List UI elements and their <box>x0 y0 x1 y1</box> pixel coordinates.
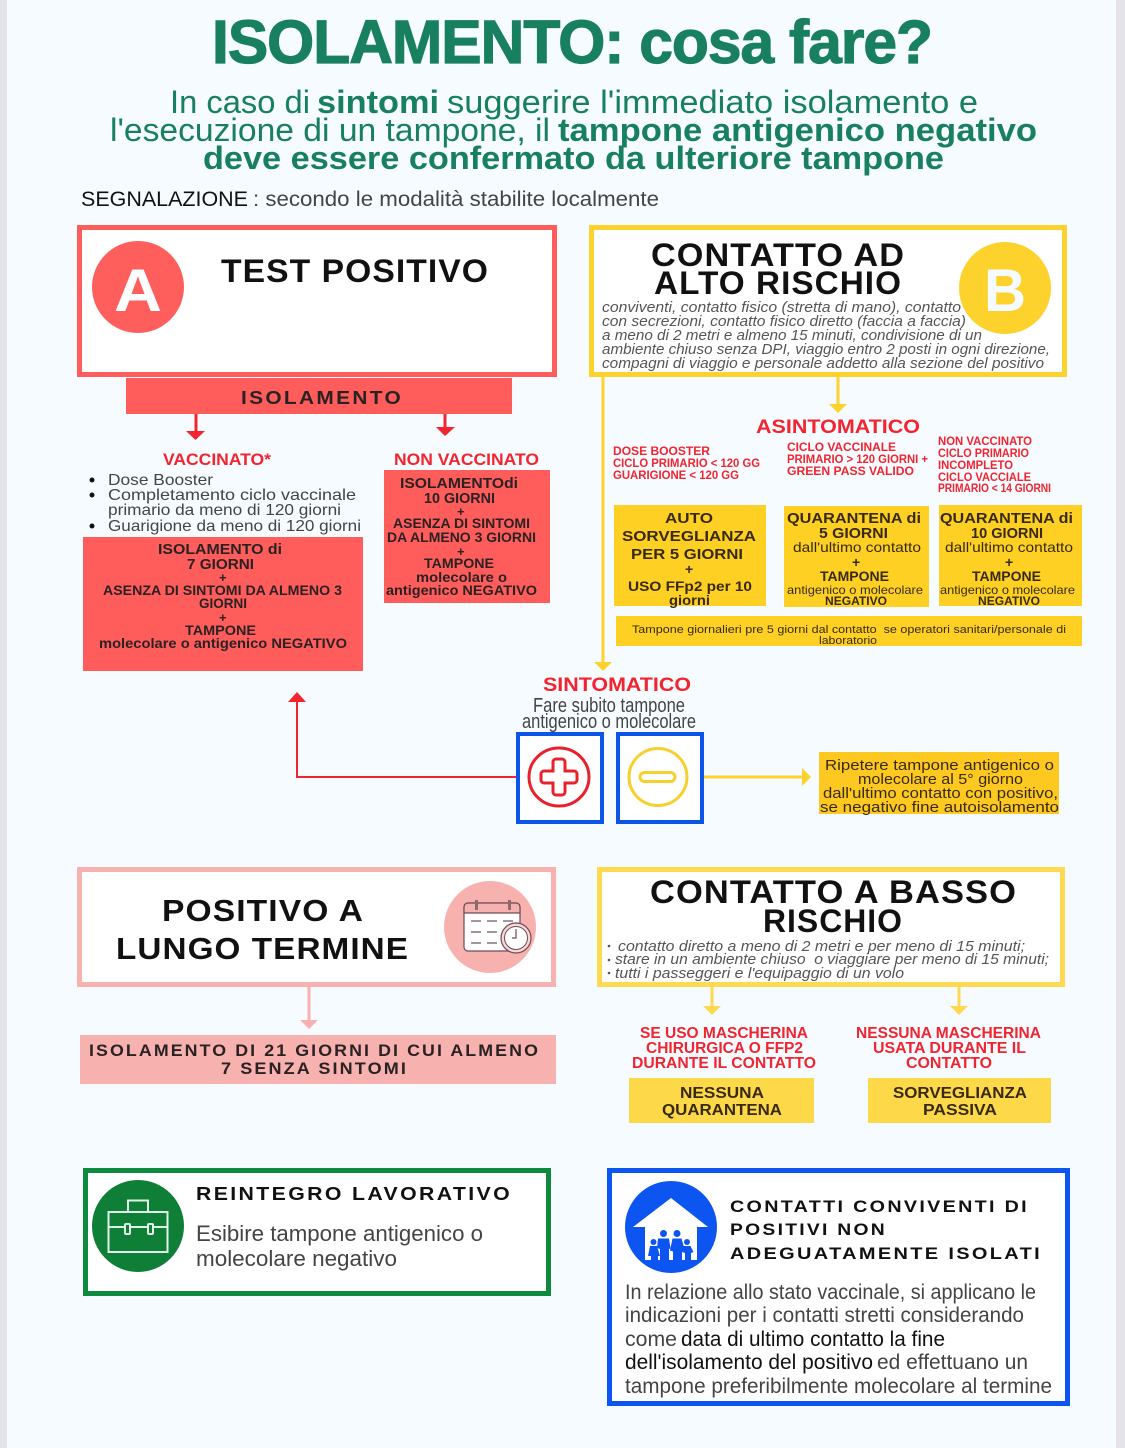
panel: non vaccinato isolation box: molecolare o <box>416 569 507 585</box>
panel: non vaccinato isolation box: TAMPONE <box>424 555 494 571</box>
panel: vaccinato isolation box: + <box>219 570 227 585</box>
icon: letter A badge <box>92 241 184 333</box>
panel: vaccinato isolation box: GIORNI <box>199 595 247 611</box>
text: esibire tampone: molecolare negativo <box>196 1246 397 1271</box>
panel: quarantena 5 giorni: TAMPONE <box>820 568 889 584</box>
arrow: positive result to test positivo <box>288 692 517 777</box>
label: se uso mascherina: DURANTE IL CONTATTO <box>632 1055 816 1072</box>
low risk description <box>608 938 1049 982</box>
high risk description: compagni di viaggio e personale addetto alla sezione del positivo <box>602 355 1044 372</box>
callout: ripetere tampone <box>819 752 1059 816</box>
text: contatti conviventi body: indicazioni per i contatti stretti considerando <box>625 1304 1024 1327</box>
criteria: booster: CICLO PRIMARIO < 120 GG <box>613 456 760 470</box>
icon: letter B badge <box>959 242 1051 334</box>
low risk description: stare in un ambiente chiuso o viaggiare per meno di 15 minuti; <box>615 951 1049 968</box>
panel: quarantena 5 giorni: 5 GIORNI <box>819 525 888 542</box>
icon: family house <box>625 1181 717 1273</box>
panel: quarantena 10 giorni: TAMPONE <box>972 568 1041 584</box>
high risk description: conviventi, contatto fisico (stretta di mano), contatto <box>602 299 961 316</box>
panel: A test positivo <box>80 228 554 374</box>
heading: contatto a basso rischio: RISCHIO <box>763 903 903 939</box>
subtitle: deve essere confermato da ulteriore tampone <box>203 140 944 176</box>
label: nessuna mascherina: USATA DURANTE IL <box>873 1040 1026 1057</box>
panel: nessuna quarantena <box>629 1078 814 1123</box>
vaccinated criteria list: Dose Booster <box>108 472 214 489</box>
text: fare subito tampone: Fare subito tampone <box>533 695 685 717</box>
criteria: booster: DOSE BOOSTER <box>613 444 710 458</box>
callout: ripetere tampone: se negativo fine autoisolamento <box>820 799 1059 816</box>
label: nessuna mascherina: CONTATTO <box>906 1055 992 1072</box>
heading: contatto ad alto rischio: CONTATTO AD <box>651 237 905 273</box>
panel: auto sorveglianza <box>614 505 766 608</box>
panel: non vaccinato isolation box: ISOLAMENTOdi <box>400 476 518 492</box>
panel: quarantena 5 giorni: NEGATIVO <box>825 594 887 608</box>
panel: non vaccinato isolation box: + <box>457 504 465 519</box>
text: fare subito tampone <box>522 695 696 733</box>
text: contatti conviventi body: tampone preferibilmente molecolare al termine <box>625 1375 1052 1398</box>
arrow: to nessuna mascherina <box>950 987 968 1015</box>
icon: briefcase <box>92 1180 184 1272</box>
icon: negative test <box>618 734 702 822</box>
panel: quarantena 5 giorni: antigenico o molecolare <box>787 583 923 597</box>
panel: contatto a basso rischio <box>600 870 1062 984</box>
vaccinated criteria list: Completamento ciclo vaccinale <box>108 487 356 504</box>
panel: quarantena 10 giorni: + <box>1005 554 1013 570</box>
isolamento bar: ISOLAMENTO <box>241 388 403 408</box>
isolamento 21 giorni bar: ISOLAMENTO DI 21 GIORNI DI CUI ALMENO <box>89 1041 540 1060</box>
panel: quarantena 10 giorni: NEGATIVO <box>978 594 1040 608</box>
criteria: booster <box>613 444 760 482</box>
isolamento 21 giorni bar: 7 SENZA SINTOMI <box>221 1059 408 1078</box>
text: contatti conviventi body: ed effettuano un <box>877 1351 1028 1374</box>
panel: vaccinato isolation box: ISOLAMENTO di <box>158 542 282 558</box>
panel: non vaccinato isolation box: 10 GIORNI <box>424 491 495 507</box>
panel: tampone giornaliero note: Tampone giornalieri pre 5 giorni dal contatto se operatori sanitari/personale di <box>632 624 1066 636</box>
heading: positivo a lungo termine <box>116 893 409 966</box>
subtitle <box>110 84 1037 176</box>
arrow: negative result to repeat test <box>704 768 811 786</box>
panel: sorveglianza passiva: PASSIVA <box>923 1102 997 1119</box>
panel: non vaccinato isolation box: ASENZA DI SINTOMI <box>393 515 530 531</box>
text: contatti conviventi body: In relazione allo stato vaccinale, si applicano le <box>625 1281 1036 1304</box>
callout: ripetere tampone: Ripetere tampone antigenico o <box>825 757 1054 774</box>
heading: contatti conviventi: POSITIVI NON <box>730 1220 887 1239</box>
panel: quarantena 10 giorni: dall'ultimo contatto <box>945 539 1073 555</box>
panel: vaccinato isolation box: 7 GIORNI <box>187 557 254 573</box>
text: esibire tampone <box>196 1221 483 1271</box>
criteria: non vaccinato: CICLO PRIMARIO <box>938 446 1029 460</box>
segnalazione text: : secondo le modalità stabilite localmente <box>253 188 659 211</box>
vaccinated criteria list <box>90 472 361 535</box>
panel: quarantena 10 giorni: 10 GIORNI <box>971 525 1043 542</box>
icon: letter B badge: B <box>984 257 1026 324</box>
criteria: ciclo vaccinale: CICLO VACCINALE <box>787 440 896 454</box>
panel: auto sorveglianza: giorni <box>669 592 710 608</box>
panel: contatti conviventi <box>610 1170 1068 1404</box>
low risk description: tutti i passeggeri e l'equipaggio di un volo <box>615 965 904 982</box>
heading: positivo a lungo termine: POSITIVO A <box>162 893 364 928</box>
panel: vaccinato isolation box: TAMPONE <box>185 622 256 638</box>
panel: quarantena 5 giorni <box>784 506 929 608</box>
text: fare subito tampone: antigenico o molecolare <box>522 711 696 733</box>
panel: vaccinato isolation box: ASENZA DI SINTOMI DA ALMENO 3 <box>103 582 342 598</box>
heading: test positivo: TEST POSITIVO <box>221 253 489 289</box>
panel: auto sorveglianza: AUTO <box>665 510 713 527</box>
panel: sorveglianza passiva: SORVEGLIANZA <box>893 1085 1027 1102</box>
panel: auto sorveglianza: SORVEGLIANZA <box>622 528 756 545</box>
panel: B contatto ad alto rischio <box>592 228 1064 374</box>
arrow: to asintomatico <box>829 377 847 413</box>
arrow: to non vaccinato <box>436 414 455 436</box>
panel: non vaccinato isolation box: DA ALMENO 3 GIORNI <box>387 529 536 545</box>
panel: sorveglianza passiva <box>868 1078 1051 1123</box>
heading: contatti conviventi: ADEGUATAMENTE ISOLATI <box>730 1244 1042 1263</box>
panel: non vaccinato isolation box <box>384 470 550 603</box>
panel: auto sorveglianza: PER 5 GIORNI <box>631 546 743 563</box>
criteria: non vaccinato: NON VACCINATO <box>938 434 1032 448</box>
panel: non vaccinato isolation box: + <box>457 544 465 559</box>
heading: contatto ad alto rischio: ALTO RISCHIO <box>654 265 902 301</box>
heading: sintomatico: SINTOMATICO <box>543 675 691 696</box>
icon: letter A badge: A <box>114 257 162 324</box>
label: nessuna mascherina: NESSUNA MASCHERINA <box>856 1025 1041 1042</box>
low risk description: contatto diretto a meno di 2 metri e per meno di 15 minuti; <box>618 938 1025 955</box>
heading: reintegro lavorativo: REINTEGRO LAVORATIVO <box>196 1184 512 1204</box>
icon: calendar and clock <box>444 881 536 973</box>
subtitle: suggerire l'immediato isolamento e <box>447 84 978 120</box>
panel: vaccinato isolation box <box>83 537 363 671</box>
isolamento bar <box>126 378 512 414</box>
heading: contatto a basso rischio: CONTATTO A BASSO <box>650 874 1017 910</box>
criteria: ciclo vaccinale <box>787 440 928 478</box>
panel: quarantena 5 giorni: QUARANTENA di <box>787 510 921 527</box>
arrow: to vaccinato <box>186 414 205 440</box>
subtitle: In caso di <box>170 84 310 120</box>
criteria: non vaccinato: INCOMPLETO <box>938 458 1013 472</box>
isolamento 21 giorni bar <box>80 1035 556 1084</box>
criteria: non vaccinato: PRIMARIO < 14 GIORNI <box>938 481 1051 495</box>
panel: vaccinato isolation box: + <box>219 610 227 625</box>
panel: quarantena 10 giorni <box>939 505 1082 608</box>
callout: ripetere tampone: molecolare al 5° giorno <box>858 771 1023 788</box>
heading: contatto a basso rischio <box>650 874 1017 939</box>
segnalazione text: SEGNALAZIONE <box>81 188 248 211</box>
heading: contatti conviventi: CONTATTI CONVIVENTI DI <box>730 1197 1029 1216</box>
label: nessuna mascherina <box>856 1025 1041 1072</box>
subtitle: sintomi <box>317 84 439 120</box>
heading: non vaccinato: NON VACCINATO <box>394 450 539 469</box>
panel: positivo a lungo termine <box>80 870 554 984</box>
criteria: ciclo vaccinale: GREEN PASS VALIDO <box>787 464 914 478</box>
panel: quarantena 10 giorni: antigenico o molecolare <box>940 583 1075 597</box>
text: contatti conviventi body <box>625 1281 1052 1398</box>
subtitle: tampone antigenico negativo <box>558 112 1037 148</box>
label: se uso mascherina: SE USO MASCHERINA <box>640 1025 808 1042</box>
segnalazione text <box>81 188 659 211</box>
text: contatti conviventi body: dell'isolamento del positivo <box>625 1351 873 1374</box>
icon: positive test <box>518 734 602 822</box>
high risk description <box>602 299 1050 372</box>
high risk description: ambiente chiuso senza DPI, viaggio entro 2 posti in ogni direzione, <box>602 341 1050 358</box>
high risk description: a meno di 2 metri e almeno 15 minuti, condivisione di un <box>602 327 982 344</box>
criteria: non vaccinato <box>938 434 1051 495</box>
high risk description: con secrezioni, contatto fisico diretto (faccia a faccia) <box>602 313 966 330</box>
arrow: to mascherina <box>703 987 721 1015</box>
text: contatti conviventi body: data di ultimo contatto la fine <box>681 1328 945 1351</box>
panel: tampone giornaliero note <box>616 616 1082 647</box>
arrow: to sintomatico <box>594 377 612 671</box>
text: contatti conviventi body: come <box>625 1328 677 1351</box>
heading: positivo a lungo termine: LUNGO TERMINE <box>116 931 409 966</box>
subtitle: l'esecuzione di un tampone, il <box>110 112 550 148</box>
panel: auto sorveglianza: USO FFp2 per 10 <box>628 578 752 594</box>
title: ISOLAMENTO: cosa fare? <box>212 8 932 76</box>
arrow: to isolamento 21 giorni <box>300 987 318 1029</box>
panel: reintegro lavorativo <box>86 1170 548 1294</box>
vaccinated criteria list: Guarigione da meno di 120 giorni <box>108 518 361 535</box>
panel: non vaccinato isolation box: antigenico NEGATIVO <box>386 582 537 598</box>
panel: quarantena 5 giorni: dall'ultimo contatto <box>793 539 921 555</box>
heading: asintomatico: ASINTOMATICO <box>756 417 920 438</box>
criteria: booster: GUARIGIONE < 120 GG <box>613 468 739 482</box>
criteria: ciclo vaccinale: PRIMARIO > 120 GIORNI + <box>787 452 928 466</box>
panel: quarantena 10 giorni: QUARANTENA di <box>940 510 1073 527</box>
panel: quarantena 5 giorni: + <box>852 554 860 570</box>
criteria: non vaccinato: CICLO VACCIALE <box>938 470 1031 484</box>
panel: vaccinato isolation box: molecolare o antigenico NEGATIVO <box>99 635 347 651</box>
panel: tampone giornaliero note: laboratorio <box>819 635 877 647</box>
label: se uso mascherina: CHIRURGICA O FFP2 <box>646 1040 803 1057</box>
callout: ripetere tampone: dall'ultimo contatto con positivo, <box>823 785 1058 802</box>
heading: contatti conviventi <box>730 1197 1042 1263</box>
heading: vaccinato: VACCINATO* <box>163 450 271 469</box>
panel: nessuna quarantena: QUARANTENA <box>662 1102 782 1119</box>
panel: nessuna quarantena: NESSUNA <box>680 1085 764 1102</box>
vaccinated criteria list: primario da meno di 120 giorni <box>108 502 341 519</box>
panel: auto sorveglianza: + <box>685 561 693 577</box>
label: se uso mascherina <box>632 1025 816 1072</box>
heading: contatto ad alto rischio <box>651 237 905 301</box>
text: esibire tampone: Esibire tampone antigenico o <box>196 1221 483 1246</box>
